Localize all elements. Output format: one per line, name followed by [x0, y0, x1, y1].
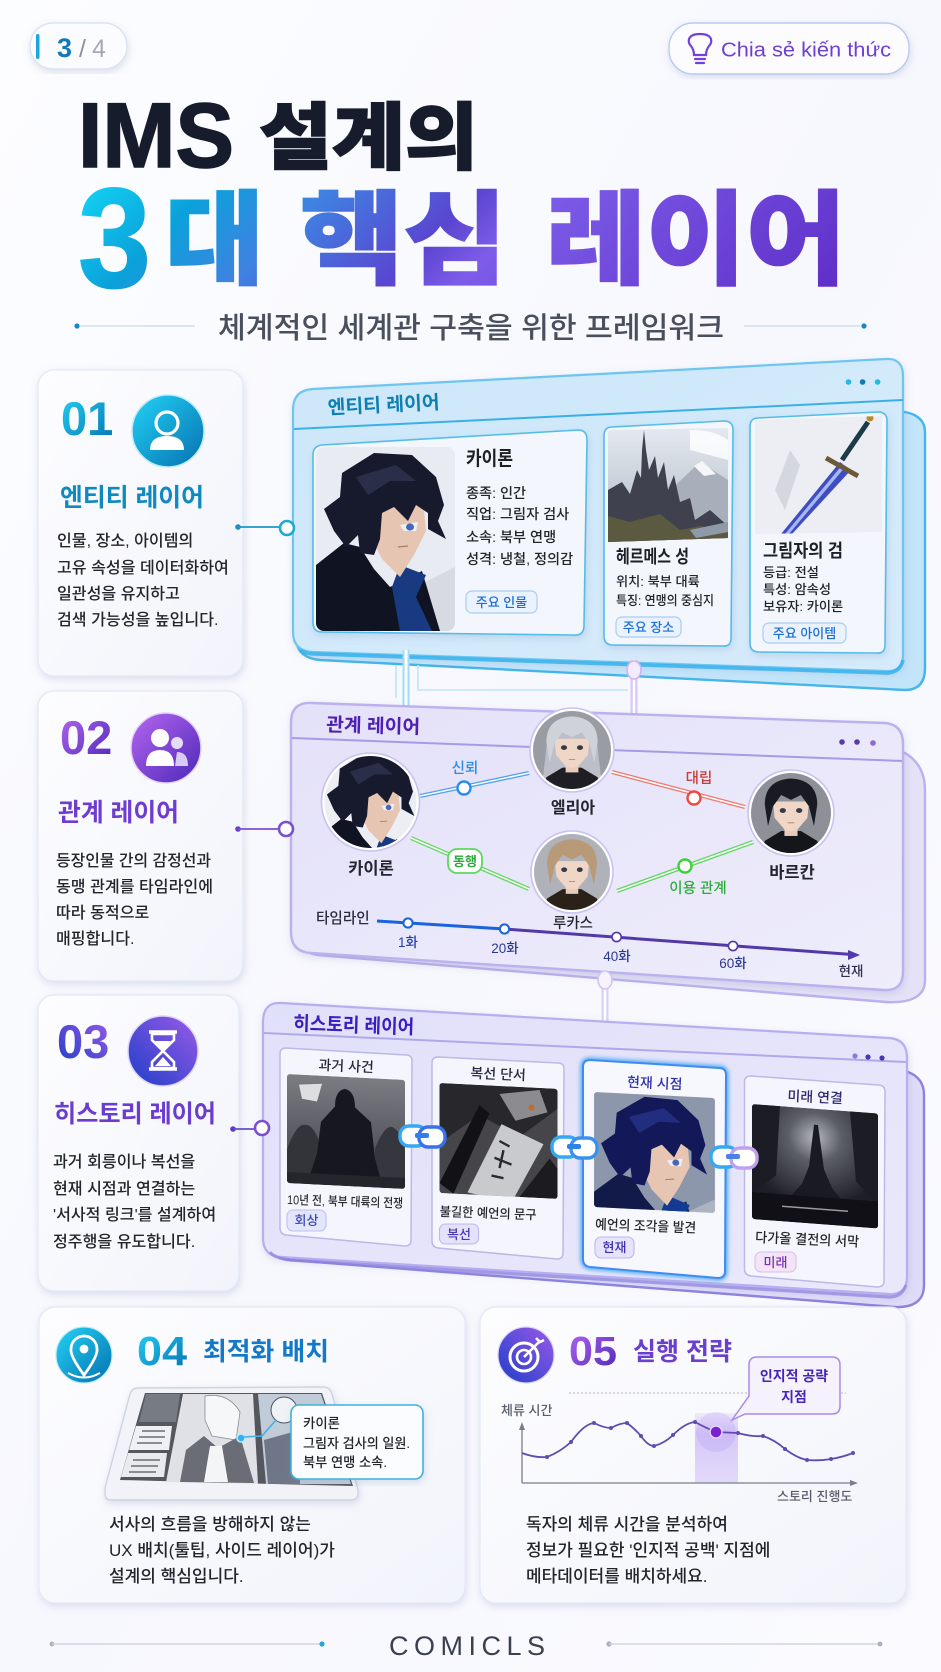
title line 1: 설계의 — [259, 98, 478, 179]
icon: map pin — [56, 1327, 112, 1383]
card: future link: 미래 연결 — [787, 1088, 843, 1106]
badge: 현재 — [603, 1240, 626, 1255]
title line 1 — [78, 85, 478, 187]
card: character Kairon: 직업: 그림자 검사 — [466, 507, 569, 523]
window dots — [852, 1053, 885, 1061]
card: past event: 10년 전, 북부 대륙의 전쟁 — [287, 1193, 403, 1211]
card: item shadow sword: 그림자의 검 — [763, 541, 843, 561]
icon: person — [132, 395, 204, 467]
relation: alliance — [411, 838, 529, 889]
panel: 03 history description — [38, 995, 239, 1291]
icon: chain link 3 — [711, 1147, 757, 1168]
node: Elia — [530, 708, 614, 817]
relation: trust: 신뢰 — [452, 760, 478, 777]
footer brand — [50, 1631, 882, 1661]
panel: 01 entity description: 01 — [61, 392, 113, 445]
panel: 01 entity description: 검색 가능성을 높입니다. — [57, 611, 218, 629]
callout — [732, 1357, 840, 1420]
timeline: 타임라인 — [316, 910, 370, 927]
panel: relation layer — [291, 703, 925, 1002]
panel: 02 relation description: 관계 레이어 — [58, 799, 179, 827]
badge — [466, 591, 537, 613]
panel: 05 execution strategy: 실행 전략 — [633, 1338, 732, 1366]
panel: 04 optimal placement: 서사의 흐름을 방해하지 않는 — [109, 1515, 311, 1534]
footer brand: COMICLS — [389, 1631, 545, 1661]
panel: 01 entity description: 엔티티 레이어 — [60, 484, 204, 512]
timeline: 1화 — [398, 935, 419, 950]
relation: conflict — [612, 770, 745, 807]
icon: chain link 1 — [400, 1126, 445, 1147]
badge: 주요 인물 — [476, 595, 527, 610]
tooltip: 그림자 검사의 일원. — [303, 1436, 410, 1451]
panel: 03 history description: 03 — [57, 1015, 109, 1068]
card: character Kairon: 소속: 북부 연맹 — [466, 530, 556, 546]
image: ominous paper — [440, 1083, 558, 1205]
chart: reader dwell time — [501, 1393, 858, 1504]
timeline: 40화 — [603, 949, 631, 964]
tooltip — [291, 1405, 423, 1479]
node: Elia: 엘리아 — [551, 799, 595, 817]
card: foreshadowing: 불길한 예언의 문구 — [439, 1204, 537, 1222]
connector: entity to relation — [396, 650, 641, 718]
panel: 02 relation description — [38, 691, 243, 981]
timeline — [316, 910, 863, 979]
card: place Hermes castle: 헤르메스 성 — [616, 547, 689, 567]
card: foreshadowing: 복선 단서 — [470, 1065, 526, 1083]
panel: 02 relation description: 매핑합니다. — [56, 930, 135, 948]
card: character Kairon — [313, 430, 587, 635]
badge — [595, 1237, 634, 1258]
subtitle — [74, 312, 867, 345]
relation: alliance: 동행 — [453, 854, 477, 869]
connector: card 01 — [235, 521, 294, 535]
portrait — [316, 447, 455, 631]
panel: 01 entity description: 고유 속성을 데이터화하여 — [57, 559, 229, 577]
window dots — [839, 739, 876, 746]
card: past event: 과거 사건 — [318, 1057, 374, 1075]
panel heading: 엔티티 레이어 — [327, 392, 440, 419]
card: character Kairon: 성격: 냉철, 정의감 — [466, 552, 573, 568]
knowledge share pill: Chia sẻ kiến thức — [721, 40, 891, 62]
card: item shadow sword — [750, 412, 887, 653]
card: future link: 다가올 결전의 서막 — [755, 1230, 860, 1250]
icon: light bulb — [689, 34, 711, 63]
timeline: 현재 — [839, 964, 863, 979]
panel heading: 히스토리 레이어 — [293, 1013, 414, 1039]
card: place Hermes castle — [604, 421, 733, 646]
node: Varkan: 바르칸 — [769, 863, 815, 882]
title line 2: 레이어 — [546, 184, 846, 298]
panel: 03 history description: 히스토리 레이어 — [54, 1101, 216, 1128]
timeline: 60화 — [719, 956, 747, 971]
icon: target — [498, 1327, 554, 1383]
page counter pill — [30, 23, 127, 69]
panel: 01 entity description: 일관성을 유지하고 — [57, 585, 180, 603]
panel: 02 relation description: 02 — [60, 711, 112, 764]
chart: reader dwell time: 스토리 진행도 — [777, 1489, 852, 1504]
card: item shadow sword: 특성: 암속성 — [763, 582, 831, 597]
title line 2 — [78, 159, 846, 318]
panel: 04 optimal placement: 최적화 배치 — [203, 1338, 329, 1366]
image: castle — [608, 428, 728, 542]
panel: 04 optimal placement — [39, 1307, 465, 1603]
chart: reader dwell time: 체류 시간 — [501, 1403, 552, 1418]
page counter pill: 4 — [92, 35, 106, 63]
panel: 05 execution strategy: 정보가 필요한 '인지적 공백' 지점에 — [526, 1541, 770, 1560]
title line 2: 핵심 — [300, 184, 507, 298]
image: hooded warrior — [287, 1074, 405, 1189]
image: sword — [775, 416, 874, 534]
badge: 주요 아이템 — [773, 626, 836, 641]
node: Lucas: 루카스 — [553, 915, 593, 932]
title line 2: 3 — [78, 159, 151, 318]
image: dark tower — [752, 1104, 878, 1228]
node: Varkan — [748, 770, 834, 882]
panel: 02 relation description: 등장인물 간의 감정선과 — [56, 852, 211, 870]
title line 2: 대 — [165, 184, 264, 298]
knowledge share pill — [669, 23, 909, 74]
panel: 05 execution strategy: 메타데이터를 배치하세요. — [526, 1567, 708, 1586]
card: future link — [744, 1076, 885, 1287]
card: character Kairon: 카이론 — [466, 448, 513, 470]
timeline: 20화 — [491, 941, 519, 956]
panel: 01 entity description — [38, 370, 243, 676]
panel: 05 execution strategy — [480, 1307, 906, 1603]
icon: chain link 2 — [552, 1137, 597, 1158]
node: Lucas — [531, 831, 613, 932]
page counter pill: 3 — [57, 33, 72, 63]
subtitle: 체계적인 세계관 구축을 위한 프레임워크 — [218, 312, 724, 345]
window dots — [846, 379, 880, 385]
relation: exploit — [617, 842, 753, 897]
connector: card 03 — [230, 1121, 269, 1135]
panel: 04 optimal placement: 설계의 핵심입니다. — [109, 1567, 244, 1586]
badge: 회상 — [295, 1213, 318, 1228]
relation: conflict: 대립 — [686, 770, 712, 787]
card: item shadow sword: 보유자: 카이론 — [763, 599, 843, 614]
badge: 미래 — [764, 1255, 787, 1270]
tooltip: 북부 연맹 소속. — [303, 1455, 387, 1470]
panel: 02 relation description: 동맹 관계를 타임라인에 — [56, 878, 213, 896]
node: Kairon — [321, 750, 421, 882]
panel: 04 optimal placement: 04 — [137, 1328, 187, 1374]
connector: card 02 — [235, 822, 293, 836]
callout: 지점 — [781, 1389, 807, 1405]
panel: 02 relation description: 따라 동적으로 — [56, 904, 150, 922]
badge: 복선 — [447, 1227, 471, 1242]
badge — [763, 623, 846, 643]
connector: relation to history — [598, 971, 612, 1022]
badge — [287, 1210, 326, 1231]
panel: 05 execution strategy: 05 — [569, 1328, 617, 1374]
card: present point: 예언의 조각을 발견 — [595, 1217, 696, 1236]
badge: 주요 장소 — [623, 620, 674, 635]
icon: hourglass — [128, 1016, 198, 1086]
panel: history layer — [263, 1003, 924, 1307]
card: past event — [280, 1048, 412, 1246]
card: present point: 현재 시점 — [627, 1074, 683, 1092]
callout: 인지적 공략 — [760, 1368, 828, 1384]
illustration: tablet with comic — [105, 1387, 423, 1500]
card: character Kairon: 종족: 인간 — [466, 486, 526, 502]
card: foreshadowing — [432, 1057, 564, 1259]
panel: 01 entity description: 인물, 장소, 아이템의 — [57, 532, 193, 550]
relation: trust — [420, 760, 529, 796]
card: item shadow sword: 등급: 전설 — [763, 565, 819, 580]
page counter pill: / — [79, 35, 86, 63]
badge — [440, 1224, 478, 1244]
panel: 03 history description: 정주행을 유도합니다. — [53, 1233, 195, 1251]
node: Kairon: 카이론 — [348, 859, 394, 878]
panel: 03 history description: 과거 회릉이나 복선을 — [53, 1153, 195, 1171]
panel: 03 history description: 현재 시점과 연결하는 — [53, 1180, 195, 1198]
card: place Hermes castle: 특징: 연맹의 중심지 — [616, 593, 714, 608]
relation: exploit: 이용 관계 — [669, 880, 727, 897]
panel: 03 history description: '서사적 링크'를 설계하여 — [53, 1206, 216, 1224]
badge — [616, 617, 681, 637]
panel: entity layer — [293, 359, 925, 690]
tooltip: 카이론 — [303, 1416, 340, 1431]
title line 1: IMS — [78, 85, 234, 187]
icon: people — [131, 713, 201, 783]
card: present point — [583, 1060, 726, 1278]
panel heading: 관계 레이어 — [326, 714, 420, 738]
badge — [755, 1252, 796, 1272]
card: place Hermes castle: 위치: 북부 대륙 — [616, 574, 700, 589]
panel: 04 optimal placement: UX 배치(툴팁, 사이드 레이어)가 — [109, 1541, 335, 1560]
panel: 05 execution strategy: 독자의 체류 시간을 분석하여 — [526, 1515, 728, 1534]
image: hero — [594, 1092, 715, 1213]
